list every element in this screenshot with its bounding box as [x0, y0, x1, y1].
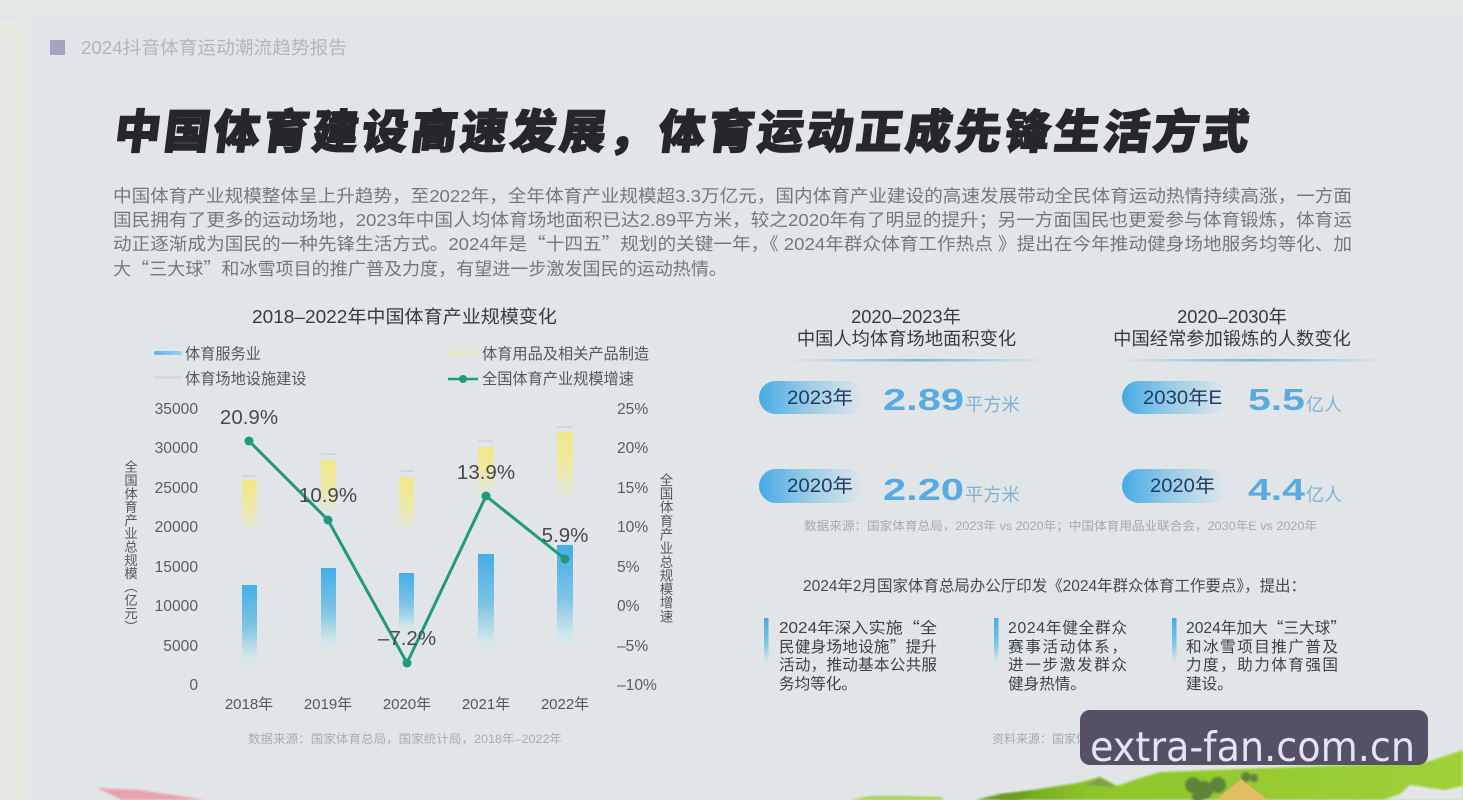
left axis labels: 15000	[155, 559, 198, 576]
policy point 3	[1172, 616, 1346, 693]
policy point 1: 2024年深入实施 “全	[779, 616, 937, 638]
stat 2030: 2030年E	[1143, 387, 1222, 409]
policy point 1: 民健身场地设施”提升	[779, 635, 937, 657]
heading	[797, 306, 1016, 349]
right axis labels: –5%	[617, 638, 648, 655]
stat 2020	[1122, 469, 1342, 507]
policy point 3: 和冰雪项目推广普及	[1186, 638, 1338, 656]
legend: 体育场地设施建设	[185, 371, 306, 388]
watermark: extra-fan.com.cn	[1090, 723, 1415, 771]
data labels: 20.9%	[220, 406, 278, 429]
policy point 1	[764, 616, 937, 693]
stat 2030	[1122, 381, 1342, 417]
intro paragraph: 中国体育产业规模整体呈上升趋势，至2022年，全年体育产业规模超3.3万亿元，国内体育产业建设的高速发展带动全民体育运动热情持续高涨，一方面	[113, 186, 1352, 206]
left axis labels: 25000	[155, 480, 198, 497]
stacked bars	[242, 426, 573, 667]
stat 2020	[759, 469, 1020, 507]
policy point 1: 活动，推动基本公共服	[779, 656, 937, 674]
left axis labels: 10000	[155, 598, 198, 615]
left axis title: 全国体育产业总规模（亿元）	[122, 459, 138, 633]
intro paragraph: 大“三大球”和冰雪项目的推广普及力度，有望进一步激发国民的运动热情。	[113, 256, 727, 281]
stat 2023: 平方米	[965, 394, 1020, 415]
report header: 2024抖音体育运动潮流趋势报告	[81, 38, 347, 58]
left axis labels	[155, 401, 198, 694]
stat 2030: 亿人	[1306, 395, 1342, 415]
data labels: –7.2%	[378, 627, 436, 650]
legend: 全国体育产业规模增速	[482, 370, 634, 388]
stats source: 数据来源：国家体育总局，2023年 vs 2020年；中国体育用品业联合会，2030年E vs 2020年	[804, 518, 1317, 533]
title: 中国体育建设高速发展，体育运动正成先锋生活方式	[112, 106, 1252, 158]
stat 2020: 2020年	[1150, 475, 1215, 497]
decoration: green hills and tent	[850, 750, 1463, 800]
policy source: 资料来源：国家体育总局	[992, 731, 1124, 746]
left axis labels: 5000	[163, 638, 198, 655]
heading: 中国人均体育场地面积变化	[797, 328, 1016, 349]
policy point 3: 2024年加大“三大球”	[1186, 616, 1346, 638]
chart source: 数据来源：国家体育总局，国家统计局，2018年–2022年	[248, 731, 562, 746]
x axis labels: 2018年	[225, 696, 273, 713]
policy point 2: 进一步激发群众	[1008, 656, 1127, 674]
intro paragraph: 国民拥有了更多的运动场地，2023年中国人均体育场地面积已达2.89平方米，较之2020年有了明显的提升；另一方面国民也更爱参与体育锻炼，体育运	[113, 210, 1352, 230]
stat 2023: 2023年	[787, 387, 853, 409]
left axis labels: 35000	[155, 401, 198, 418]
data labels: 10.9%	[299, 484, 357, 507]
stat 2030: 5.5	[1248, 382, 1305, 417]
policy point 2: 赛事活动体系，	[1008, 637, 1127, 656]
right axis labels: –10%	[617, 677, 657, 694]
x axis labels: 2021年	[462, 696, 510, 713]
right axis labels: 5%	[617, 559, 640, 576]
x axis labels	[225, 696, 589, 713]
left axis labels: 0	[189, 677, 198, 694]
data labels: 5.9%	[542, 524, 588, 547]
panel: regular exercisers	[1113, 306, 1390, 507]
stat 2023	[759, 381, 1020, 417]
policy point 3: 建设。	[1186, 675, 1233, 693]
policy point 2	[994, 618, 1127, 693]
legend: 体育服务业	[185, 346, 261, 363]
growth rate line	[244, 436, 570, 668]
right axis labels: 20%	[617, 440, 648, 457]
right axis labels: 0%	[617, 598, 640, 615]
heading	[1113, 306, 1351, 349]
policy point 3: 力度，助力体育强国	[1186, 656, 1338, 674]
data labels: 13.9%	[457, 461, 515, 484]
stat 2020: 2.20	[883, 472, 964, 507]
right axis labels	[617, 401, 657, 694]
stat 2023: 2.89	[883, 382, 964, 417]
left axis labels: 30000	[155, 440, 198, 457]
left axis labels: 20000	[155, 519, 198, 536]
stat 2020: 亿人	[1306, 485, 1342, 505]
data labels	[220, 406, 588, 650]
chart title: 2018–2022年中国体育产业规模变化	[252, 306, 557, 327]
stat 2020: 4.4	[1248, 472, 1306, 507]
right axis labels: 25%	[617, 401, 648, 418]
intro paragraph	[113, 186, 1352, 281]
policy heading: 2024年2月国家体育总局办公厅印发《2024年群众体育工作要点》，提出：	[803, 577, 1306, 595]
x axis labels: 2019年	[304, 696, 352, 713]
left pale edge	[0, 0, 36, 800]
stat 2020: 2020年	[787, 475, 853, 497]
x axis labels: 2022年	[541, 696, 589, 713]
decoration: red ribbon	[97, 788, 205, 800]
legend	[154, 346, 649, 388]
stat 2020: 平方米	[965, 484, 1020, 505]
policy point 1: 务均等化。	[779, 675, 857, 693]
top light band	[0, 0, 1463, 20]
policy point 2: 2024年健全群众	[1008, 619, 1127, 637]
intro paragraph: 动正逐渐成为国民的一种先锋生活方式。2024年是 “十四五”规划的关键一年，《 2024年群众体育工作热点 》提出在今年推动健身场地服务均等化、加	[113, 231, 1352, 256]
policy point 2: 健身热情。	[1008, 675, 1086, 693]
right axis labels: 15%	[617, 480, 648, 497]
right axis labels: 10%	[617, 519, 648, 536]
legend: 体育用品及相关产品制造	[482, 346, 649, 363]
heading: 2020–2023年	[851, 306, 961, 327]
panel: venue area per capita	[759, 306, 1050, 507]
panel: industry scale chart	[122, 306, 673, 746]
x axis labels: 2020年	[383, 696, 431, 713]
heading: 中国经常参加锻炼的人数变化	[1113, 328, 1351, 349]
right axis title: 全国体育产业总规模增速	[658, 472, 673, 624]
heading: 2020–2030年	[1177, 306, 1287, 327]
